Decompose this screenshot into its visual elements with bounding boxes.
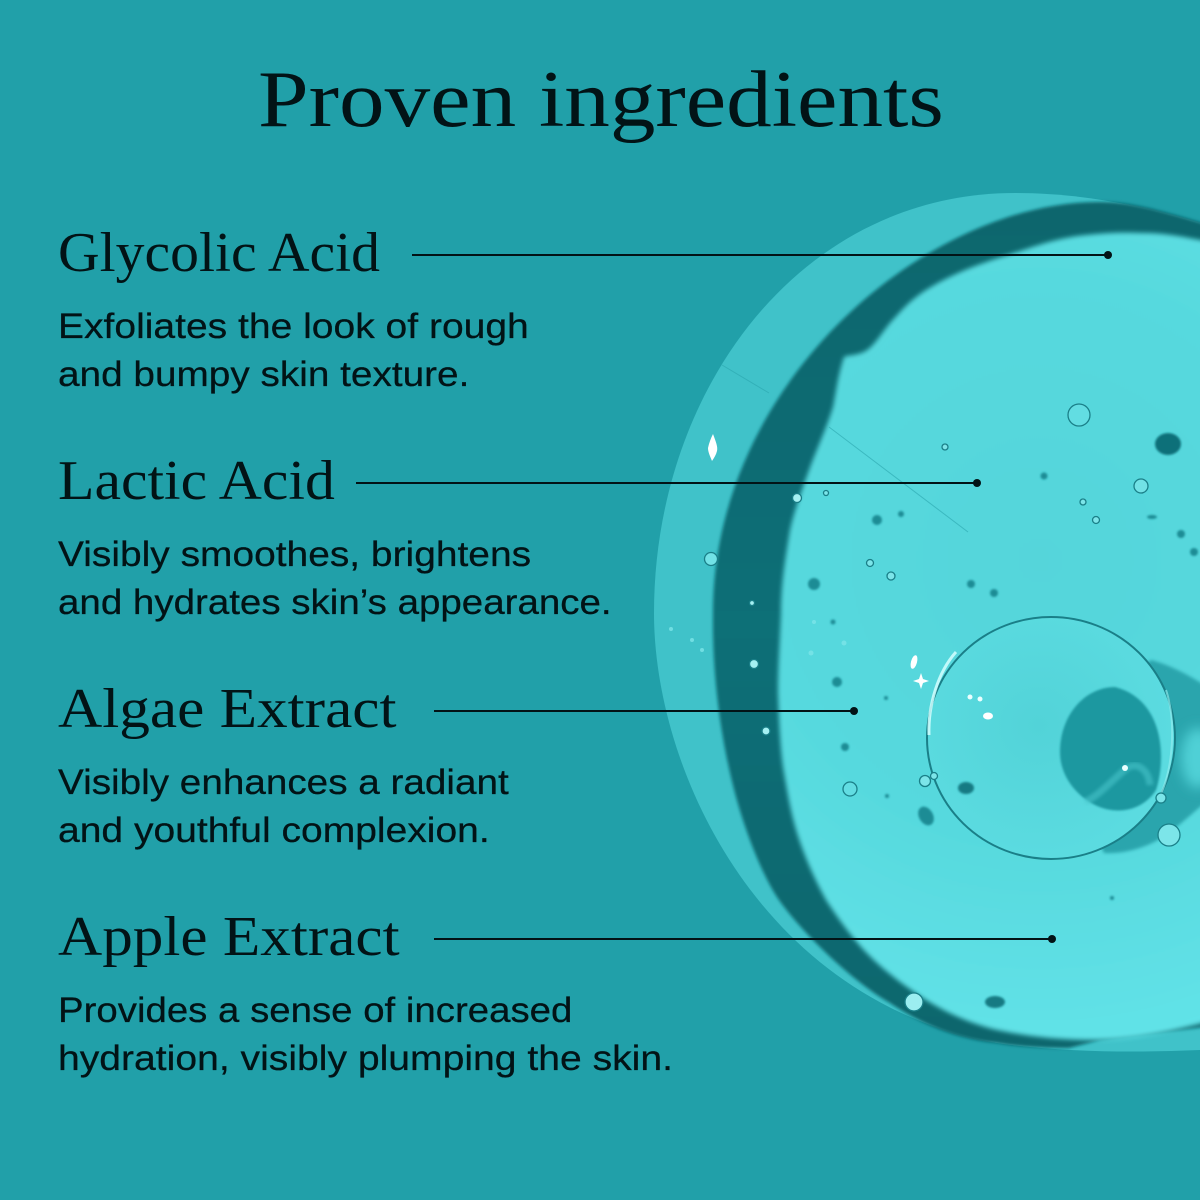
outer pale gel halo	[654, 193, 1200, 1052]
large bubble	[927, 617, 1175, 859]
heading: Apple Extract: Apple Extract	[58, 906, 400, 968]
text: Apple Extract description: Provides a sense of increased	[58, 991, 572, 1030]
inner gel pool	[778, 233, 1200, 1040]
text: Glycolic Acid description: and bumpy skin texture.	[58, 355, 469, 394]
dark gel ring	[713, 202, 1200, 1048]
connector: Lactic Acid	[356, 479, 981, 487]
large bubble shadow	[1050, 660, 1200, 853]
connector: Apple Extract	[434, 935, 1056, 943]
text: Apple Extract description: hydration, visibly plumping the skin.	[58, 1039, 673, 1078]
text: Algae Extract description: and youthful complexion.	[58, 811, 490, 850]
text: Apple Extract description	[58, 991, 673, 1078]
heading: Glycolic Acid: Glycolic Acid	[58, 222, 380, 284]
connector: Algae Extract	[434, 707, 858, 715]
heading: Algae Extract: Algae Extract	[58, 678, 396, 740]
heading: Lactic Acid: Lactic Acid	[58, 450, 335, 512]
faint scratch lines	[722, 365, 968, 532]
text: Lactic Acid description: Visibly smoothes, brightens	[58, 535, 531, 574]
text: Glycolic Acid description	[58, 307, 529, 394]
tiny droplets	[669, 620, 846, 656]
text: Algae Extract description: Visibly enhances a radiant	[58, 763, 509, 802]
text: Lactic Acid description: and hydrates skin’s appearance.	[58, 583, 612, 622]
bubbles and droplets	[704, 404, 1180, 1011]
dark specks	[808, 433, 1198, 1008]
glints	[708, 434, 929, 689]
text: Glycolic Acid description: Exfoliates the look of rough	[58, 307, 529, 346]
bubble inner dark spot	[1060, 687, 1161, 810]
connector: Glycolic Acid	[412, 251, 1112, 259]
title: Proven ingredients	[258, 54, 944, 144]
text: Lactic Acid description	[58, 535, 612, 622]
text: Algae Extract description	[58, 763, 509, 850]
